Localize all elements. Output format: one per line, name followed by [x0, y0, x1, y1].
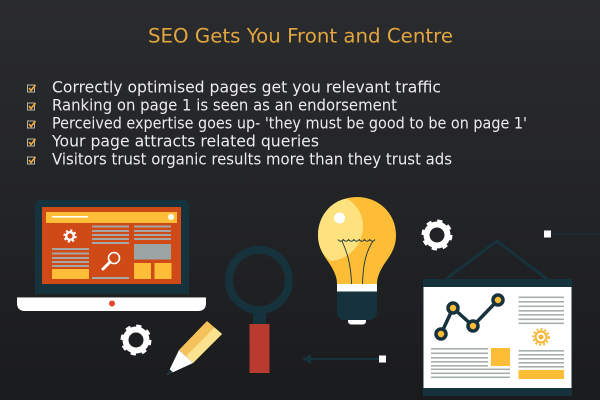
list item 4: Your page attracts related queries	[51, 132, 319, 150]
board text lines	[431, 296, 564, 378]
base dot	[109, 300, 115, 306]
laptop illustration	[17, 200, 206, 311]
pencil icon	[167, 321, 222, 375]
board blocks	[491, 348, 564, 379]
light bulb	[318, 197, 396, 324]
check icon 5	[28, 157, 36, 164]
check icon 3	[28, 121, 36, 128]
board frame	[423, 279, 572, 396]
line chart	[436, 295, 503, 339]
screen text lines	[52, 226, 171, 279]
arrow pointing left	[302, 354, 386, 364]
check icon 1	[28, 85, 36, 92]
title: SEO Gets You Front and Centre	[148, 24, 453, 48]
check icon 4	[28, 139, 36, 146]
connector top right	[544, 230, 600, 238]
screen gear icon	[64, 230, 76, 242]
board gear icon	[533, 329, 549, 345]
screen blocks	[52, 244, 172, 279]
browser bar	[46, 212, 177, 223]
presentation board	[423, 241, 572, 396]
screen magnifier icon	[103, 252, 120, 269]
base edge	[17, 297, 206, 298]
laptop screen	[42, 207, 181, 284]
check icon 2	[28, 103, 36, 110]
laptop base	[17, 297, 206, 311]
list item 5: Visitors trust organic results more than they trust ads	[52, 150, 452, 168]
checklist	[28, 78, 527, 168]
list item 3: Perceived expertise goes up- 'they must be good to be on page 1'	[52, 114, 527, 132]
board hanger	[446, 241, 547, 279]
gear icon right	[424, 222, 450, 248]
board sheet	[424, 287, 572, 388]
list item 1: Correctly optimised pages get you relevant traffic	[52, 78, 441, 96]
laptop body	[35, 200, 189, 294]
gear icon left	[122, 326, 150, 354]
list item 2: Ranking on page 1 is seen as an endorsement	[52, 96, 397, 114]
magnifying glass	[229, 250, 289, 373]
